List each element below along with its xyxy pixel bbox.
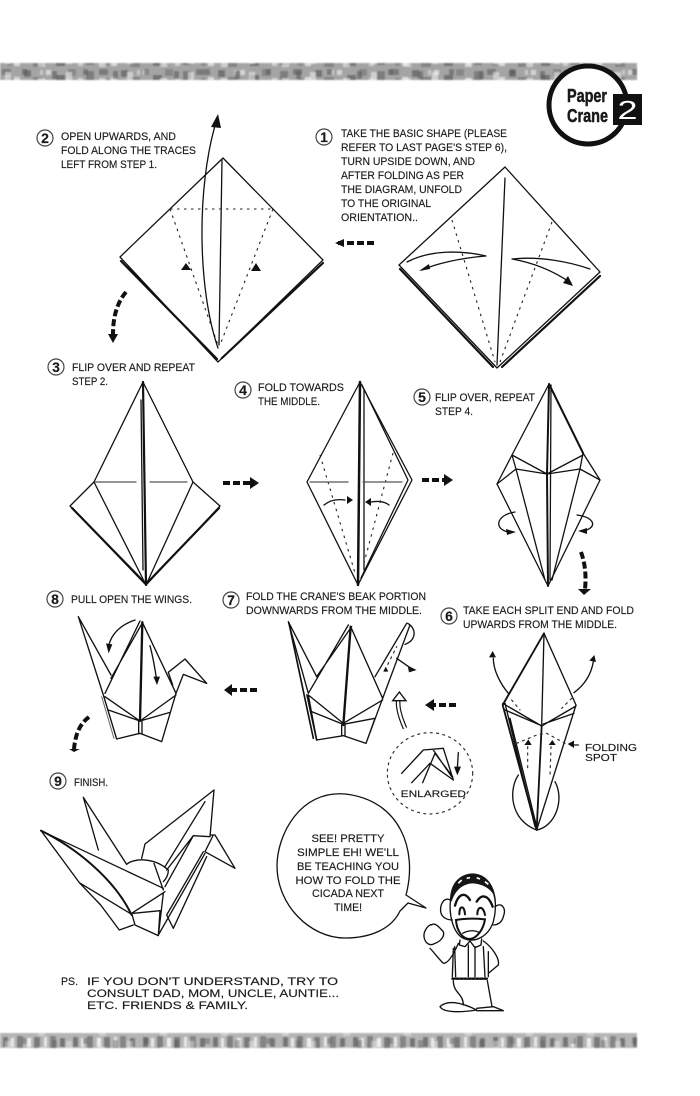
title badge: Paper Crane 2: Paper	[567, 86, 607, 106]
step 3: STEP 2.	[72, 376, 108, 388]
step 9 finished crane	[41, 773, 235, 936]
PS note: PS.	[61, 976, 78, 988]
step 1: 1	[320, 129, 328, 145]
step 5: FLIP OVER, REPEAT	[435, 392, 535, 404]
title badge: Paper Crane 2: Crane	[567, 106, 608, 126]
speech bubble: BE TEACHING YOU	[297, 861, 399, 873]
step 8: PULL OPEN THE WINGS.	[71, 594, 192, 606]
step 6: FOLDING	[585, 743, 637, 754]
step 1: REFER TO LAST PAGE'S STEP 6),	[341, 142, 507, 154]
PS note	[61, 976, 339, 1012]
step 4: 4	[239, 382, 247, 398]
step 7: FOLD THE CRANE'S BEAK PORTION	[246, 591, 426, 603]
step 8	[47, 591, 207, 752]
step 6: SPOT	[585, 753, 617, 764]
PS note: CONSULT DAD, MOM, UNCLE, AUNTIE...	[87, 988, 339, 1000]
step 4: THE MIDDLE.	[258, 396, 320, 408]
step 5: 5	[418, 389, 426, 405]
step 2: LEFT FROM STEP 1.	[61, 159, 157, 171]
step 1: AFTER FOLDING AS PER	[341, 170, 464, 182]
step 5: STEP 4.	[435, 406, 473, 418]
step 6: TAKE EACH SPLIT END AND FOLD	[463, 605, 634, 617]
enlarged beak detail	[387, 692, 473, 814]
step 4: FOLD TOWARDS	[258, 382, 344, 394]
step 7: 7	[227, 592, 235, 608]
PS note: ETC. FRIENDS & FAMILY.	[87, 1000, 248, 1012]
speech bubble: CICADA NEXT	[312, 888, 384, 900]
speech bubble: TIME!	[334, 902, 362, 914]
arrow: step 6 to 7	[425, 699, 456, 711]
step 9 finished crane: FINISH.	[74, 777, 108, 789]
step 2: FOLD ALONG THE TRACES	[61, 145, 196, 157]
step 1	[316, 128, 600, 368]
bottom screentone band	[0, 1033, 637, 1048]
arrow: step 3 to 4	[223, 477, 259, 489]
step 4	[235, 382, 412, 585]
top screentone band	[0, 63, 637, 80]
step 1: TURN UPSIDE DOWN, AND	[341, 156, 475, 168]
title badge: Paper Crane 2: 2	[618, 95, 638, 125]
PS note: IF YOU DON'T UNDERSTAND, TRY TO	[87, 976, 339, 988]
step 2: 2	[41, 130, 49, 146]
cartoon character	[424, 873, 504, 1012]
speech bubble: HOW TO FOLD THE	[296, 875, 400, 887]
step 7: DOWNWARDS FROM THE MIDDLE.	[246, 605, 422, 617]
speech bubble	[277, 794, 426, 938]
step 7	[223, 591, 426, 743]
arrow: step 4 to 5	[422, 474, 453, 486]
step 6: 6	[445, 608, 453, 624]
enlarged beak detail: ENLARGED	[401, 789, 466, 799]
step 3	[48, 359, 220, 585]
step 1: THE DIAGRAM, UNFOLD	[341, 184, 462, 196]
speech bubble: SEE! PRETTY	[312, 833, 385, 845]
step 2	[37, 114, 323, 362]
arrow: step 7 to 8	[224, 684, 257, 696]
step 9 finished crane: 9	[54, 773, 62, 789]
step 3: FLIP OVER AND REPEAT	[72, 362, 195, 374]
step 1: ORIENTATION..	[341, 212, 418, 224]
step 3: 3	[52, 359, 60, 375]
step 6	[441, 605, 637, 830]
step 2: OPEN UPWARDS, AND	[61, 131, 176, 143]
step 1: TAKE THE BASIC SHAPE (PLEASE	[341, 128, 507, 140]
step 5	[414, 384, 600, 595]
step 6: UPWARDS FROM THE MIDDLE.	[463, 619, 617, 631]
step 1: TO THE ORIGINAL	[341, 198, 431, 210]
title badge: Paper Crane 2	[549, 66, 642, 144]
step 8: 8	[51, 591, 59, 607]
speech bubble: SIMPLE EH! WE'LL	[297, 847, 399, 859]
